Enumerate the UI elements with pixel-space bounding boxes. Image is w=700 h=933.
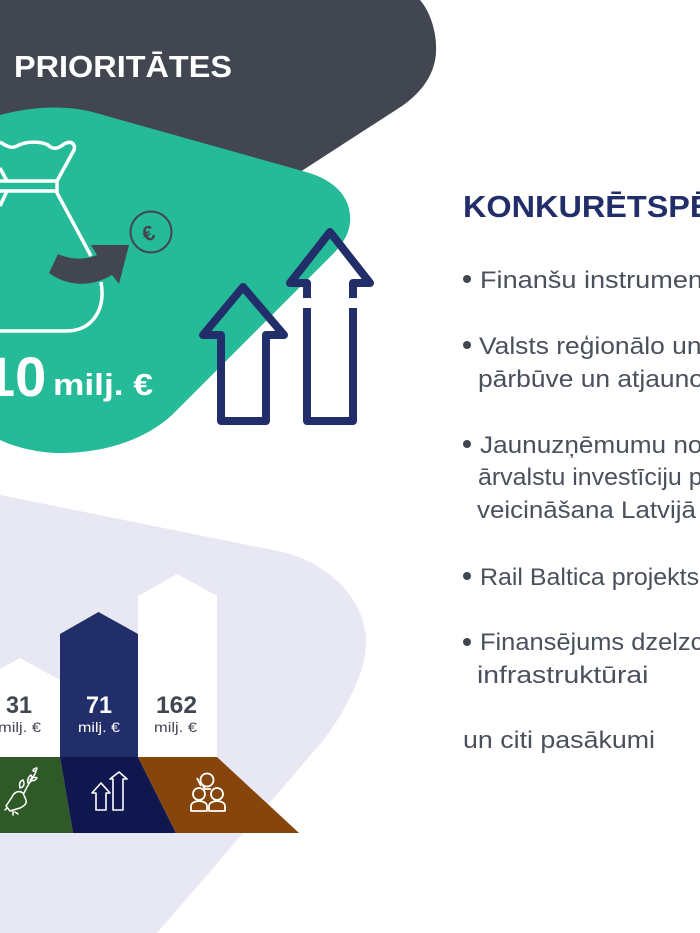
icon: plug with leaves — [5, 768, 37, 815]
bar: 71 million: milj. € — [78, 719, 120, 735]
icon: growth arrows — [203, 232, 370, 421]
icon: money bag — [0, 142, 102, 331]
bar: 162 million: 162 — [156, 692, 197, 719]
bar: 162 million: milj. € — [154, 719, 197, 735]
bar: 71 million: 71 — [86, 692, 112, 719]
icon: small growth arrows — [92, 772, 127, 810]
icon: group of people — [191, 774, 225, 811]
base: green segment — [0, 757, 73, 833]
icon: euro coin: € — [139, 221, 159, 247]
closing line: other measures: un citi pasākumi — [463, 727, 655, 754]
icon: arrow to euro — [49, 245, 129, 284]
bullet: railway funding: infrastruktūrai — [477, 661, 648, 688]
panel: dark header shape — [0, 0, 436, 200]
text block: competitiveness measures — [463, 267, 700, 754]
bullet: start-ups and investment: veicināšana Latvijā — [477, 497, 696, 524]
bar chart: funding columns — [0, 574, 299, 833]
panel: lavender background shape — [0, 495, 366, 933]
heading: priorities: PRIORITĀTES — [14, 49, 232, 84]
amount: 10 million euro: milj. € — [53, 367, 153, 402]
base: navy segment — [60, 757, 176, 833]
bar: 162 million — [138, 574, 217, 757]
panel: green funding shape — [0, 107, 350, 453]
bullet: railway funding — [463, 630, 700, 688]
bar: 71 million — [60, 612, 138, 757]
bar: 31 million: 31 — [6, 692, 32, 719]
bullet: regional roads — [463, 333, 700, 393]
icon: euro coin — [130, 212, 172, 252]
amount: 10 million euro — [0, 345, 153, 408]
bullet: start-ups and investment — [463, 432, 700, 524]
base: brown segment — [138, 757, 299, 833]
bullet: Rail Baltica: Rail Baltica projekts — [480, 564, 699, 591]
bar: 31 million — [0, 658, 60, 757]
